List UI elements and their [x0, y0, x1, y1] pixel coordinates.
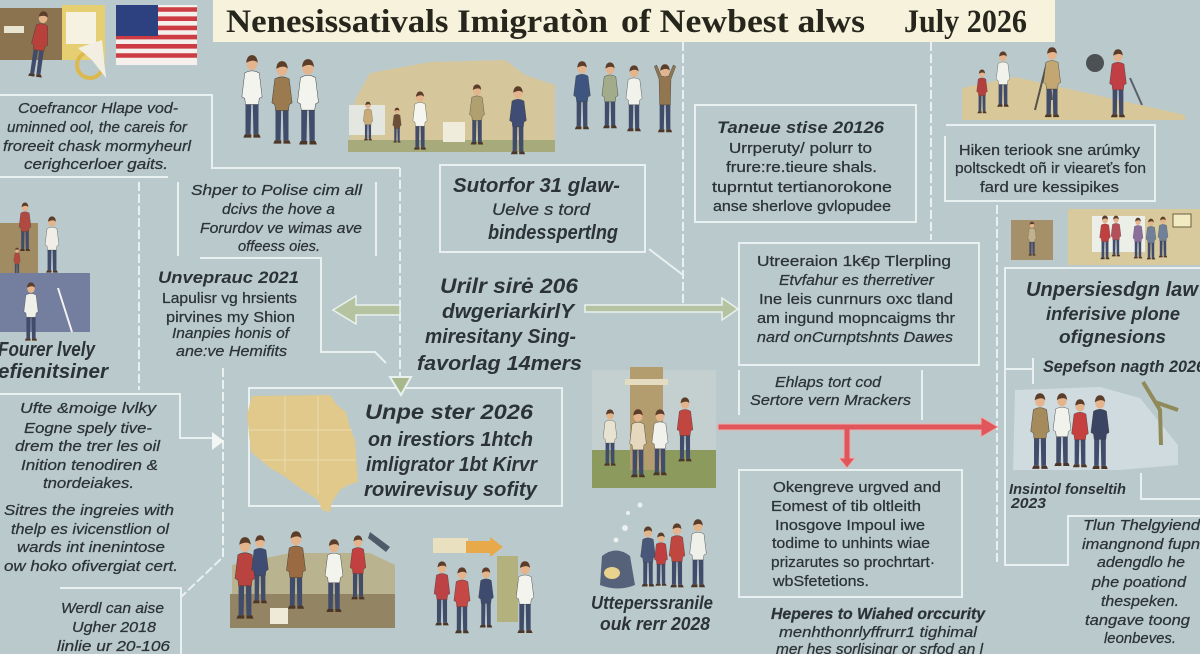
text: Ehlaps note: Ehlaps tort cod [775, 374, 882, 391]
panel: map and 2026 text [247, 388, 562, 512]
text: left notes: tnordeiakes. [43, 475, 134, 492]
panel: Unpersiesdgn heading: ofignesions [1059, 327, 1166, 347]
text: intro note [3, 100, 192, 173]
text: 2018 note: Werdl can aise [61, 600, 164, 617]
text: 2023 label: Insintol fonseltih [1009, 481, 1126, 498]
text: 2018 note [57, 600, 171, 654]
panel: Okengreve: todime to unhints wiae [772, 535, 930, 552]
text: left notes: ow hoko ofivergiat cert. [4, 558, 178, 575]
panel: map and 2026 text: imligrator 1bt Kirvr [366, 454, 538, 476]
icon: US flag [116, 5, 197, 65]
text: 2023 label [1009, 481, 1126, 512]
text: 2021 block: Lapulisr vg hrsients [162, 290, 297, 307]
panel: Okengreve: prizarutes so prochrtart· [771, 554, 935, 571]
text: right note: tangave toong [1085, 612, 1191, 629]
text: central 2026 heading [417, 275, 582, 375]
panel: Okengreve: wbSfetetions. [772, 573, 869, 590]
text: intro note: uminned ool, the careis for [7, 119, 188, 136]
title banner: of Newbest alws [621, 4, 865, 40]
text: central 2026 heading: favorlag 14mers [417, 353, 582, 375]
text: 2028 label: ouk rerr 2028 [600, 614, 710, 634]
text: bottom note: menhthonrlyffrurr1 tighimal [779, 624, 978, 641]
panel: Sutorfor [440, 165, 645, 252]
arrow: white pointer [212, 432, 224, 450]
text: 2021 block [158, 268, 299, 360]
text: left notes: Sitres the ingreies with [4, 502, 174, 519]
illustration: three people [242, 55, 318, 144]
text: left notes: Inition tenodiren & [21, 457, 158, 474]
panel: Utreeraion: Etvfahur es therretiver [779, 272, 935, 289]
panel: Utreeraion [739, 243, 979, 365]
text: left notes [4, 400, 178, 575]
text: police note: offeess oies. [238, 238, 320, 255]
text: Ehlaps note: Sertore vern Mrackers [750, 392, 912, 409]
text: right note: adengdlo he [1097, 554, 1185, 571]
title banner: Nenesissativals Imigratòn [226, 4, 608, 40]
text: left notes: Eogne spely tive- [24, 420, 152, 437]
illustration: four people [574, 61, 676, 132]
illustration: workers on a hill [230, 531, 395, 628]
heading: left side: Fourer lvely [0, 339, 96, 361]
illustration: desert scene with group [348, 60, 555, 154]
text: 2021 block: ane:ve Hemifits [176, 343, 288, 360]
text: central 2026 heading: Urilr sirė 206 [440, 275, 578, 298]
panel: Taneue: Urrperuty/ polurr to [729, 140, 872, 157]
text: left notes: Ufte &moige lvlky [20, 400, 158, 417]
panel: Okengreve: Inosgove Impoul iwe [775, 517, 925, 534]
text: right note: phe poationd [1091, 574, 1187, 591]
text: police note: Shper to Polise cim all [191, 182, 363, 199]
text: 2021 block: Unveprauc 2021 [158, 268, 299, 287]
panel: Unpersiesdgn heading: inferisive plone [1046, 304, 1180, 324]
arrow: red main with branch [718, 417, 998, 468]
panel: Hiken [945, 125, 1155, 201]
illustration: officials at a desk [0, 202, 90, 341]
heading: left side: efienitsiner [0, 361, 109, 383]
panel: map and 2026 text: Unpe ster 2026 [365, 401, 533, 424]
text: police note: dcivs the hove a [222, 201, 335, 218]
text: left notes: drem the trer les oil [15, 438, 161, 455]
panel: map and 2026 text: on irestiors 1htch [368, 429, 533, 451]
text: 2021 block: pirvines my Shion [166, 309, 295, 326]
text: right note: Tlun Thelgyiend [1083, 517, 1200, 534]
panel: Hiken: fard ure kessipikes [980, 179, 1119, 196]
text: central 2026 heading: dwgeriarkirlY [442, 301, 576, 323]
text: right note: imangnond fupn [1082, 536, 1200, 553]
text: intro note: cerighcerloer gaits. [24, 156, 168, 173]
panel: Unpersiesdgn heading: Unpersiesdgn law [1026, 279, 1199, 301]
text: right note: thespeken. [1101, 593, 1179, 610]
panel: map and 2026 text: rowirevisuy sofity [364, 479, 538, 501]
text: right note [1082, 517, 1200, 647]
panel: Utreeraion: Ine leis cunrnurs oxc tland [759, 291, 953, 308]
text: 2028 label: Utteperssranile [591, 593, 713, 613]
panel: Taneue: tuprntut tertianorokone [712, 179, 892, 196]
text: bottom note: Heperes to Wiahed orccurity [771, 606, 986, 623]
panel: Okengreve [739, 470, 962, 597]
panel: Sutorfor: Uelve s tord [492, 200, 591, 219]
panel: Unpersiesdgn heading [1026, 279, 1200, 376]
arrow: left [333, 296, 400, 324]
text: 2023 label: 2023 [1010, 495, 1047, 512]
panel: Okengreve: Okengreve urgved and [773, 479, 941, 496]
panel: Okengreve: Eomest of tib oltleith [771, 498, 921, 515]
heading: left side [0, 339, 109, 383]
text: left notes: thelp es ivicenstlion ol [11, 521, 170, 538]
panel: Utreeraion: am ingund mopncaigms thr [757, 310, 955, 327]
illustration: people at a monument [592, 367, 716, 488]
text: 2018 note: Ugher 2018 [72, 619, 157, 636]
panel: Taneue: Taneue stise 20126 [717, 118, 885, 137]
text: police note: Forurdov ve wimas ave [200, 220, 362, 237]
panel: Sutorfor: Sutorfor 31 glaw- [453, 175, 620, 197]
illustration: group portrait [1013, 382, 1178, 470]
text: intro note: froreeit chask mormyheurl [3, 138, 192, 155]
panel: Sutorfor: bindesspertlng [488, 222, 618, 244]
title banner [213, 0, 1055, 42]
panel: Utreeraion: Utreeraion 1k€p Tlerpling [757, 253, 951, 270]
text: central 2026 heading: miresitany Sing- [425, 326, 576, 348]
arrow: right [585, 298, 738, 320]
illustration: signpost with group [433, 537, 534, 633]
panel: Hiken: Hiken teriook sne arúmky [959, 142, 1141, 159]
panel: Taneue: anse sherlove gvlopudee [713, 198, 891, 215]
panel: Utreeraion: nard onCurnptshnts Dawes [757, 329, 954, 346]
text: 2021 block: Inanpies honis of [172, 325, 291, 342]
illustration: family with bag [600, 502, 706, 588]
illustration: icon and small group [1011, 209, 1200, 265]
panel: Taneue [695, 105, 916, 222]
text: bottom note [771, 606, 986, 654]
text: police note [191, 182, 363, 255]
text: intro note: Coefrancor Hlape vod- [18, 100, 178, 117]
text: 2028 label [591, 593, 713, 634]
panel: Hiken: poltsckedt oñ ir vieareťs fon [955, 160, 1146, 177]
text: Ehlaps note [750, 374, 912, 409]
panel: Taneue: frure:re.tieure shals. [726, 159, 877, 176]
illustration: surveyors on a slope [962, 47, 1185, 120]
arrow: down to map panel [390, 377, 411, 395]
text: right note: leonbeves. [1104, 630, 1176, 647]
title banner: July 2026 [904, 4, 1027, 40]
text: left notes: wards int inenintose [17, 539, 165, 556]
illustration: man pinning notices [0, 5, 106, 78]
